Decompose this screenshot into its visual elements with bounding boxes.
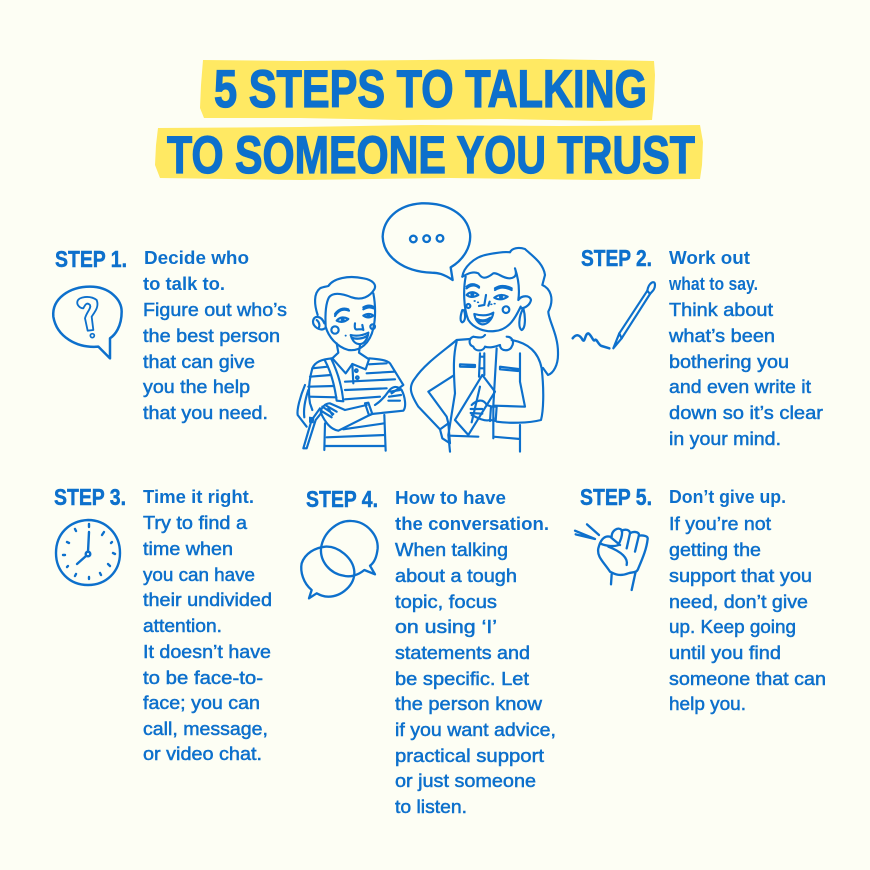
step 5 text bbox=[669, 513, 826, 714]
title highlight: line 2 bbox=[155, 125, 703, 180]
step 3 text: their undivided bbox=[143, 589, 272, 610]
icon: overlapping speech bubbles bbox=[301, 521, 378, 598]
step 5 text: support that you bbox=[669, 565, 812, 586]
step 3 text bbox=[143, 512, 272, 764]
step 3 text: call, message, bbox=[143, 718, 268, 739]
step 3 text: you can have bbox=[143, 564, 255, 585]
panel: step 5 bbox=[575, 484, 826, 714]
step 2 heading bbox=[668, 247, 758, 294]
step 3 heading: Time it right. bbox=[143, 486, 254, 507]
step 5 text: If you’re not bbox=[669, 513, 771, 534]
step 4 text: to listen. bbox=[395, 796, 467, 817]
step 4 text bbox=[395, 539, 556, 817]
step 5 text: someone that can bbox=[669, 668, 826, 689]
step 3 text: attention. bbox=[143, 615, 222, 636]
step 3 text: It doesn’t have bbox=[143, 641, 271, 662]
step 2 text bbox=[668, 299, 823, 449]
step 2 text: and even write it bbox=[669, 376, 811, 397]
step 2 text: down so it’s clear bbox=[669, 402, 823, 423]
step 4 text: statements and bbox=[395, 642, 530, 663]
icon: pen and scribble bbox=[573, 282, 655, 348]
step 4 label: STEP 4. bbox=[306, 486, 378, 512]
step 3 label: STEP 3. bbox=[54, 484, 126, 510]
step 4 text: practical support bbox=[395, 745, 544, 766]
step 2 heading: Work out bbox=[669, 247, 750, 268]
title line 2: TO SOMEONE YOU TRUST bbox=[167, 126, 695, 185]
step 4 heading: the conversation. bbox=[395, 513, 549, 534]
step 4 text: topic, focus bbox=[395, 591, 497, 612]
step 5 heading: Don’t give up. bbox=[669, 486, 786, 507]
step 2 text: what’s been bbox=[668, 325, 775, 346]
icon: raised fist bbox=[575, 524, 648, 590]
step 3 text: Try to find a bbox=[143, 512, 248, 533]
step 4 text: be specific. Let bbox=[395, 668, 529, 689]
step 2 label: STEP 2. bbox=[581, 245, 652, 271]
girl: head and ponytail bbox=[461, 248, 558, 375]
step 4 heading bbox=[395, 487, 549, 534]
step 4 text: on using ‘I’ bbox=[395, 616, 497, 637]
title bbox=[155, 59, 703, 185]
step 2 text: Think about bbox=[669, 299, 773, 320]
icon: clock bbox=[56, 520, 120, 585]
boy: striped shirt with crossed arms and backpack bbox=[297, 343, 405, 451]
step 2 text: in your mind. bbox=[669, 428, 781, 449]
boy: head bbox=[313, 277, 375, 350]
title highlight: line 1 bbox=[200, 59, 655, 121]
step 4 text: about a tough bbox=[395, 565, 517, 586]
step 5 text: until you find bbox=[669, 642, 781, 663]
step 5 text: up. Keep going bbox=[669, 616, 796, 637]
step 5 label: STEP 5. bbox=[580, 484, 652, 510]
step 1 heading: Decide who bbox=[144, 247, 249, 268]
panel: step 4 bbox=[301, 486, 556, 817]
girl: jacket, clipboard and hand bbox=[411, 335, 543, 452]
step 5 text: need, don’t give bbox=[669, 591, 808, 612]
step 4 text: or just someone bbox=[395, 770, 536, 791]
step 1 heading: to talk to. bbox=[143, 273, 225, 294]
step 4 heading: How to have bbox=[395, 487, 506, 508]
step 3 text: time when bbox=[143, 538, 233, 559]
step 1 text: that you need. bbox=[143, 402, 268, 423]
step 3 text: to be face-to- bbox=[143, 667, 263, 688]
step 1 text: the best person bbox=[143, 325, 280, 346]
title line 1: 5 STEPS TO TALKING bbox=[214, 60, 647, 119]
speech bubble with dots bbox=[383, 203, 470, 280]
step 2 text: bothering you bbox=[669, 351, 789, 372]
step 4 text: if you want advice, bbox=[395, 719, 556, 740]
step 1 text: Figure out who’s bbox=[143, 299, 287, 320]
panel: step 2 bbox=[573, 245, 823, 449]
step 2 heading: what to say. bbox=[668, 273, 758, 294]
step 1 text bbox=[143, 299, 287, 423]
step 1 heading bbox=[143, 247, 249, 294]
step 5 text: help you. bbox=[669, 693, 746, 714]
step 1 text: that can give bbox=[143, 351, 255, 372]
step 3 text: or video chat. bbox=[143, 743, 262, 764]
step 1 label: STEP 1. bbox=[55, 246, 127, 272]
step 1 text: you the help bbox=[143, 376, 250, 397]
step 4 text: the person know bbox=[395, 693, 543, 714]
illustration: two people talking bbox=[297, 203, 558, 452]
icon: question speech bubble bbox=[53, 287, 122, 358]
step 4 text: When talking bbox=[395, 539, 508, 560]
step 3 text: face; you can bbox=[143, 692, 260, 713]
panel: step 3 bbox=[54, 484, 272, 764]
panel: step 1 bbox=[53, 246, 287, 423]
step 5 text: getting the bbox=[669, 539, 761, 560]
